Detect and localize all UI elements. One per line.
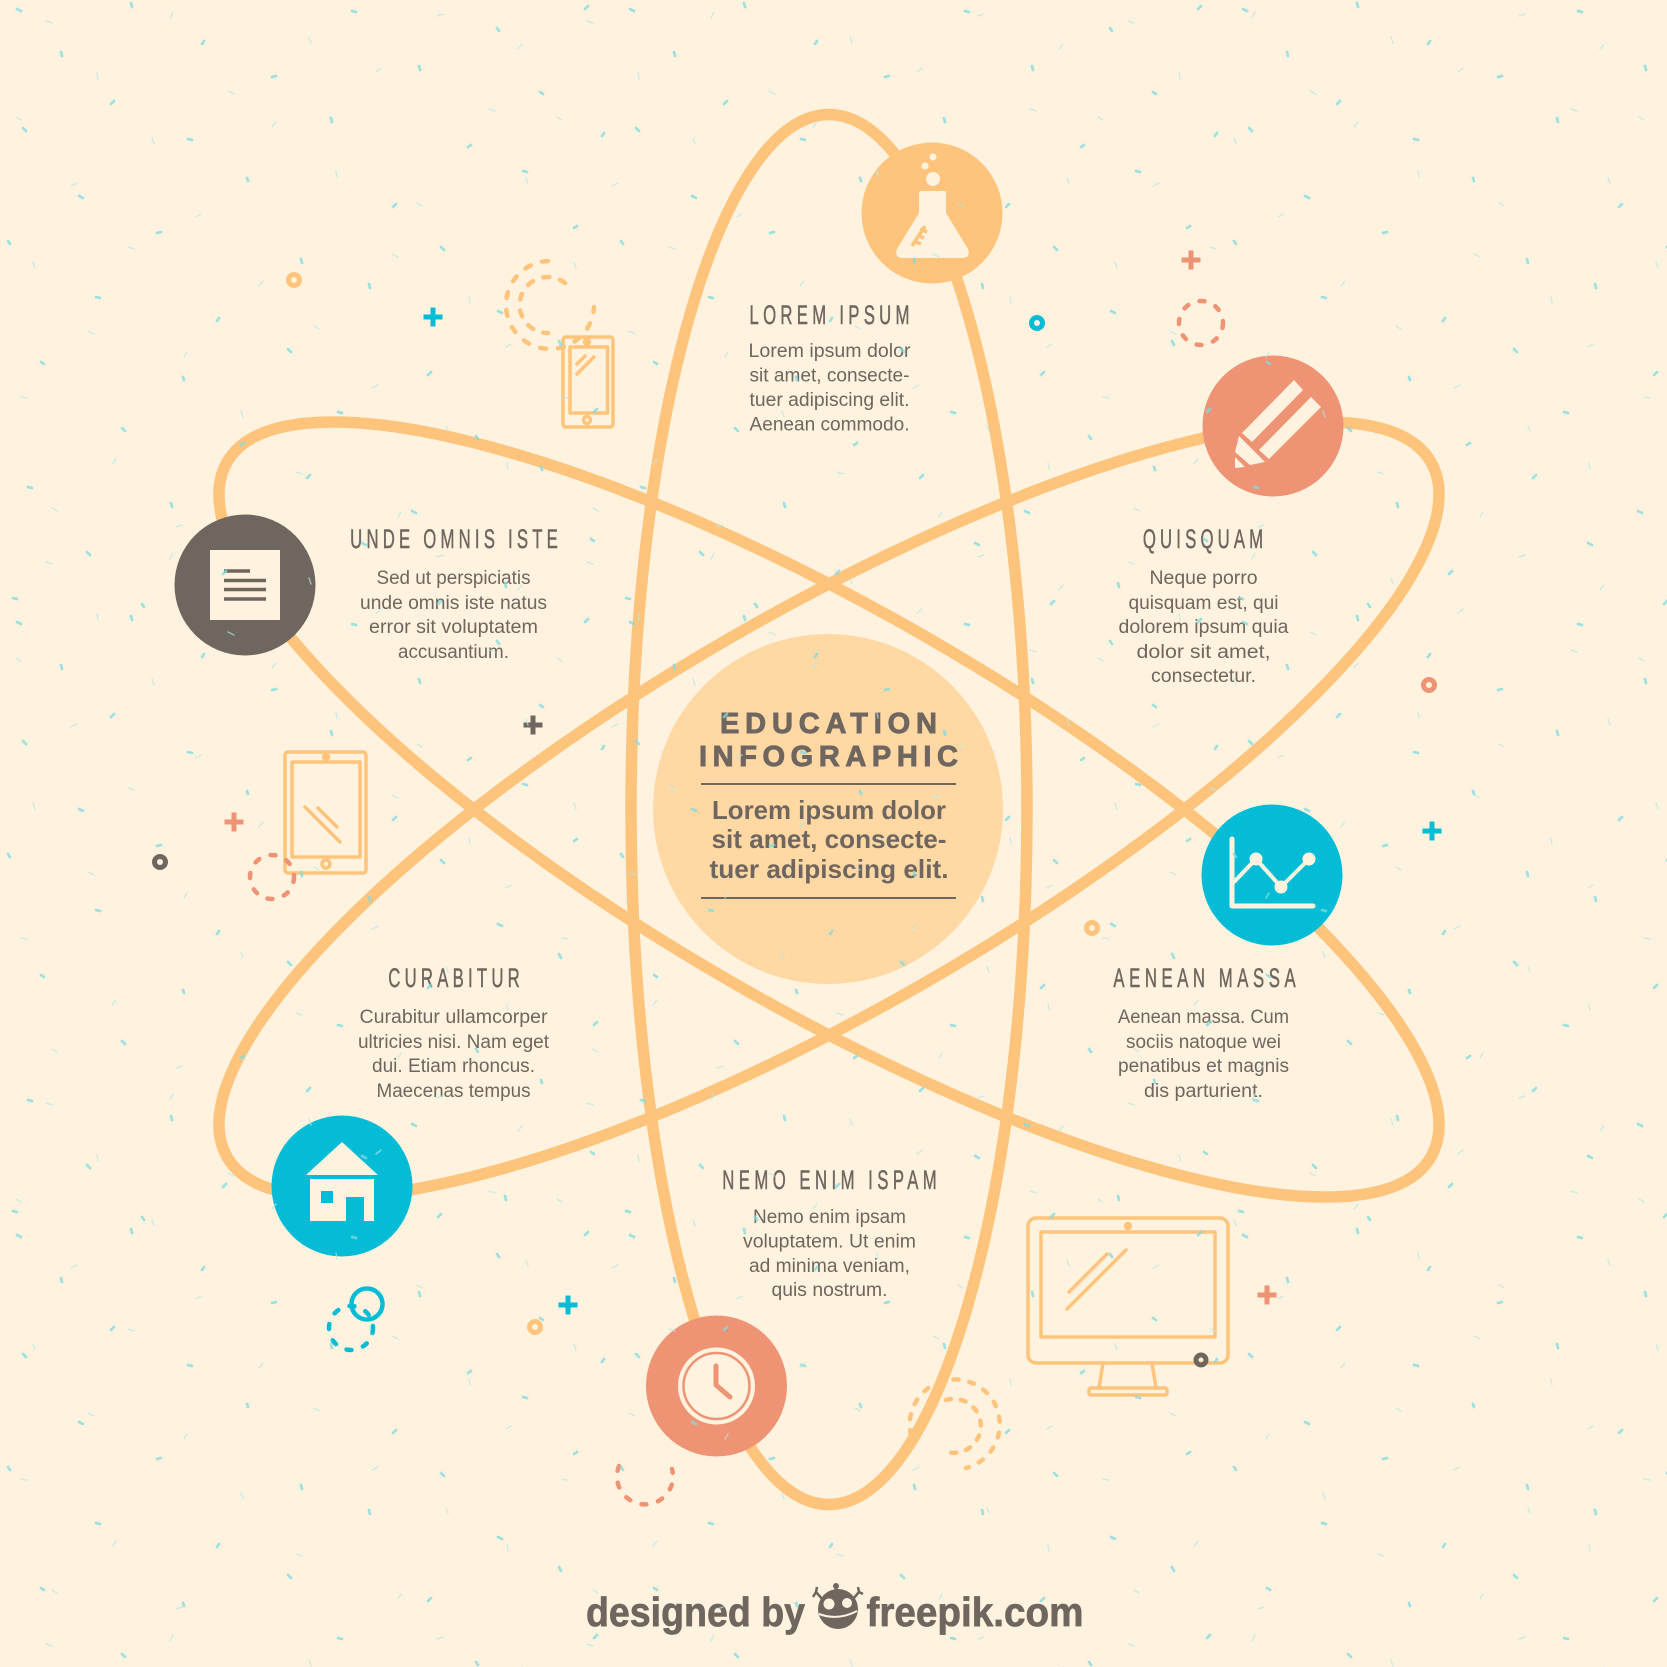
body text: dolor sit amet, <box>1136 642 1270 663</box>
title: INFOGRAPHIC <box>699 741 958 773</box>
footer credit: freepik.com <box>866 1589 1084 1635</box>
icon: document <box>174 514 316 656</box>
panel: nemo enim ispam <box>722 1165 937 1301</box>
footer credit <box>586 1583 1084 1635</box>
panel: quisquam <box>1118 524 1289 687</box>
icon: phone outline <box>563 337 613 427</box>
icon: tablet outline <box>285 752 366 873</box>
icon: monitor outline <box>1028 1218 1228 1395</box>
footer credit: designed by <box>586 1589 805 1635</box>
body text: Aenean commodo. <box>750 414 910 436</box>
center circle <box>653 634 1003 984</box>
panel: lorem ipsum <box>748 300 911 436</box>
subtitle: Lorem ipsum dolor <box>712 795 946 825</box>
title: EDUCATION <box>720 708 937 740</box>
body text: dolorem ipsum quia <box>1118 617 1289 638</box>
body text: ultricies nisi. Nam eget <box>358 1032 550 1053</box>
subtitle <box>710 795 948 884</box>
heading: LOREM IPSUM <box>750 300 909 330</box>
icon: house <box>272 1116 412 1256</box>
body text <box>358 1007 550 1102</box>
body text: error sit voluptatem <box>369 617 538 638</box>
heading: NEMO ENIM ISPAM <box>722 1165 937 1195</box>
decorative small rings <box>154 274 1434 1365</box>
body text <box>1118 1007 1289 1102</box>
body text: unde omnis iste natus <box>360 593 547 614</box>
body text <box>748 341 911 436</box>
body text: dui. Etiam rhoncus. <box>372 1056 535 1077</box>
body text: consectetur. <box>1151 666 1256 687</box>
heading: AENEAN MASSA <box>1113 963 1296 993</box>
body text: sit amet, consecte- <box>750 366 910 386</box>
body text: sociis natoque wei <box>1126 1032 1281 1053</box>
body text: accusantium. <box>398 642 509 663</box>
heading: QUISQUAM <box>1143 524 1263 554</box>
body text: voluptatem. Ut enim <box>743 1232 916 1252</box>
panel: unde omnis iste <box>350 524 558 663</box>
body text: dis parturient. <box>1144 1081 1263 1102</box>
subtitle: sit amet, consecte- <box>712 824 946 854</box>
body text <box>1118 568 1289 687</box>
subtitle: tuer adipiscing elit. <box>710 854 948 884</box>
icon: flask <box>862 142 1002 284</box>
body text: Aenean massa. Cum <box>1118 1007 1289 1028</box>
panel: curabitur <box>358 963 550 1102</box>
panel: aenean massa <box>1113 963 1296 1102</box>
body text: Lorem ipsum dolor <box>748 341 911 362</box>
body text: penatibus et magnis <box>1118 1056 1289 1077</box>
body text: Nemo enim ipsam <box>753 1207 906 1228</box>
icon: pencil <box>1202 356 1344 496</box>
icon: line chart <box>1202 804 1342 946</box>
body text: Neque porro <box>1150 568 1258 589</box>
body text: Sed ut perspiciatis <box>376 568 530 589</box>
center title block <box>699 708 958 899</box>
decorative plus signs <box>224 250 1442 1314</box>
icon: clock <box>646 1316 787 1456</box>
title <box>699 708 958 773</box>
icon: mascot <box>813 1583 863 1629</box>
body text: Curabitur ullamcorper <box>360 1007 548 1028</box>
body text: quisquam est, qui <box>1128 593 1278 614</box>
body text: Maecenas tempus <box>376 1081 530 1102</box>
heading: UNDE OMNIS ISTE <box>350 524 558 554</box>
body text: ad minima veniam, <box>749 1256 910 1277</box>
body text <box>743 1207 916 1301</box>
body text <box>360 568 547 663</box>
body text: quis nostrum. <box>772 1280 888 1301</box>
decorative dashed rings <box>250 261 1223 1504</box>
orbit ellipses <box>128 114 1530 1504</box>
heading: CURABITUR <box>388 963 520 993</box>
body text: tuer adipiscing elit. <box>750 390 910 411</box>
